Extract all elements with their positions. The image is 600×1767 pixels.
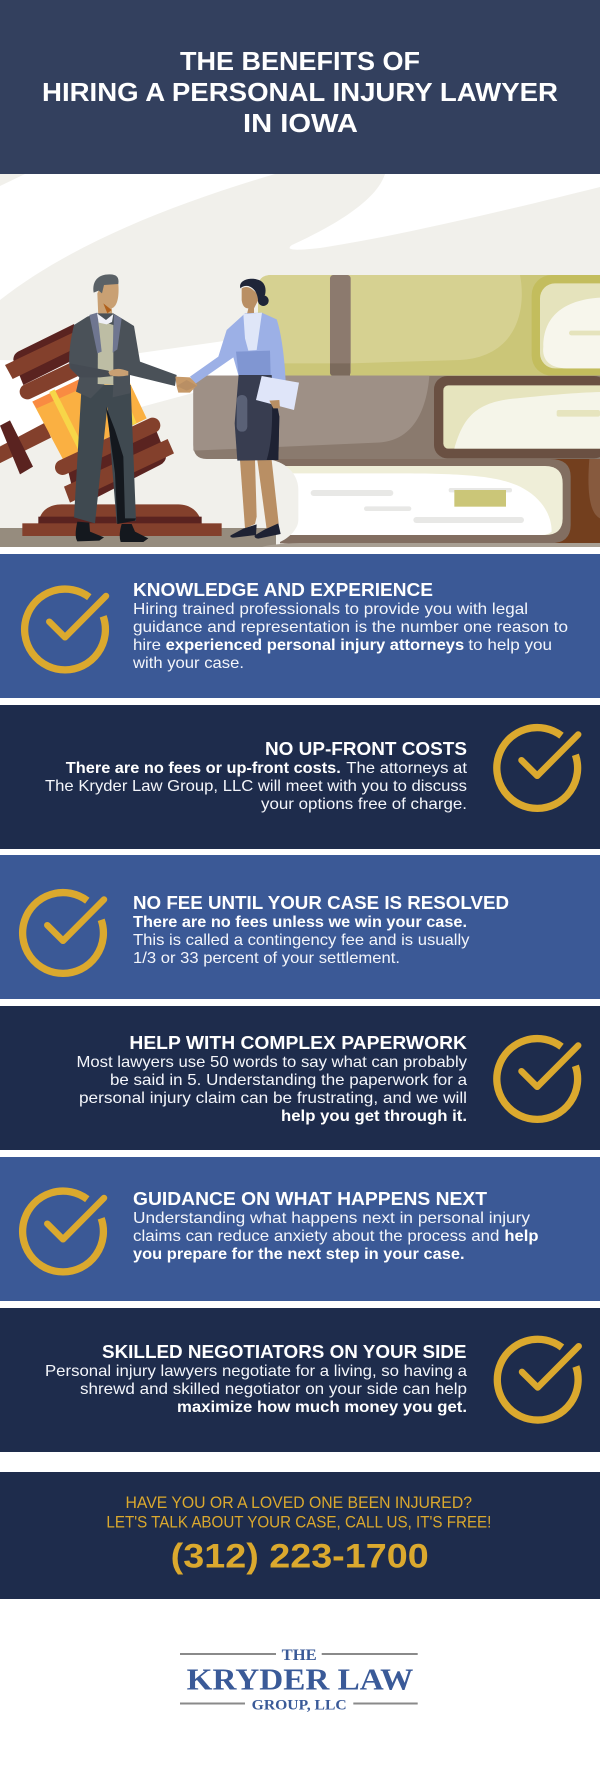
heading: KNOWLEDGE AND EXPERIENCE [133,579,433,600]
icon: check circle [497,1039,578,1119]
logo: The Kryder Law Group, LLC: GROUP, LLC [252,1697,347,1713]
panel: no up-front costs [0,705,600,849]
body text: your options free of charge. [261,796,467,813]
illustration: handshake between client and lawyer with gavel and law books [0,174,600,547]
heading: GUIDANCE ON WHAT HAPPENS NEXT [133,1188,488,1209]
body text [132,601,568,672]
illustration background swooshes [0,174,600,547]
ground strip [0,528,600,547]
body text: There are no fees unless we win your case. [133,914,467,931]
rightmost brown book [547,459,600,543]
body text: This is called a contingency fee and is usually [133,932,470,949]
body text: shrewd and skilled negotiator on your side can help [80,1381,467,1398]
heading: NO UP-FRONT COSTS [265,738,467,759]
call to action text: HAVE YOU OR A LOVED ONE BEEN INJURED? [126,1494,472,1512]
figure: male lawyer in suit [69,274,177,542]
pale page end [200,459,298,543]
body text: The Kryder Law Group, LLC will meet with you to discuss [45,778,467,795]
icon: check circle [497,1339,579,1420]
logo: The Kryder Law Group, LLC [180,1647,418,1713]
body text: help [504,1228,539,1245]
icon: check circle [23,893,104,973]
body text: guidance and representation is the number one reason to [133,619,568,636]
panel: no fee until your case is resolved [0,855,600,999]
header banner with title: HIRING A PERSONAL INJURY LAWYER [42,77,558,107]
body text [133,1210,539,1263]
body text: experienced personal injury attorneys [166,637,464,654]
icon: check circle [25,589,106,670]
call to action panel [0,1472,600,1599]
figure: female client with documents [190,279,299,539]
body text: There are no fees or up-front costs. [66,760,341,777]
phone number: (312) 223-1700 [171,1538,429,1576]
icon: gavel and sound block [0,324,222,536]
body text: help you get through it. [281,1108,467,1125]
middle grey-brown book [193,376,600,459]
panel: skilled negotiators on your side [0,1308,600,1452]
body text: with your case. [132,655,244,672]
call to action text: LET'S TALK ABOUT YOUR CASE, CALL US, IT'S FREE! [106,1514,491,1532]
body text: you prepare for the next step in your case. [133,1246,465,1263]
body text: The attorneys at [346,760,468,777]
body text: Hiring trained professionals to provide you with legal [133,601,528,618]
heading: HELP WITH COMPLEX PAPERWORK [129,1032,468,1053]
handshake [175,377,197,393]
header banner with title: IN IOWA [243,108,358,138]
panel: help with complex paperwork [0,1006,600,1150]
header banner with title [0,0,600,174]
heading: SKILLED NEGOTIATORS ON YOUR SIDE [102,1341,466,1362]
body text: Personal injury lawyers negotiate for a living, so having a [45,1363,467,1380]
panel: knowledge and experience [0,554,600,698]
icon: check circle [497,728,578,808]
body text: hire [133,637,161,654]
body text: Understanding what happens next in personal injury [133,1210,530,1227]
icon: stacked law books [193,275,600,543]
heading: NO FEE UNTIL YOUR CASE IS RESOLVED [133,892,509,913]
body text: claims can reduce anxiety about the process and [133,1228,499,1245]
body text [45,1363,467,1416]
logo: The Kryder Law Group, LLC: KRYDER LAW [187,1661,413,1696]
bottom book with open pages [247,459,571,543]
body text: maximize how much money you get. [177,1399,467,1416]
body text [133,914,470,967]
top olive book [258,275,600,376]
body text: personal injury claim can be frustrating, and we will [79,1090,467,1107]
body text [45,760,468,813]
icon: check circle [23,1191,104,1272]
logo: The Kryder Law Group, LLC: THE [282,1647,317,1664]
body text: be said in 5. Understanding the paperwork for a [110,1072,467,1089]
panel: guidance on what happens next [0,1157,600,1301]
body text [76,1054,467,1125]
header banner with title: THE BENEFITS OF [180,46,420,76]
call to action text [106,1494,491,1532]
body text: to help you [468,637,552,654]
body text: 1/3 or 33 percent of your settlement. [133,950,400,967]
body text: Most lawyers use 50 words to say what can probably [76,1054,467,1071]
